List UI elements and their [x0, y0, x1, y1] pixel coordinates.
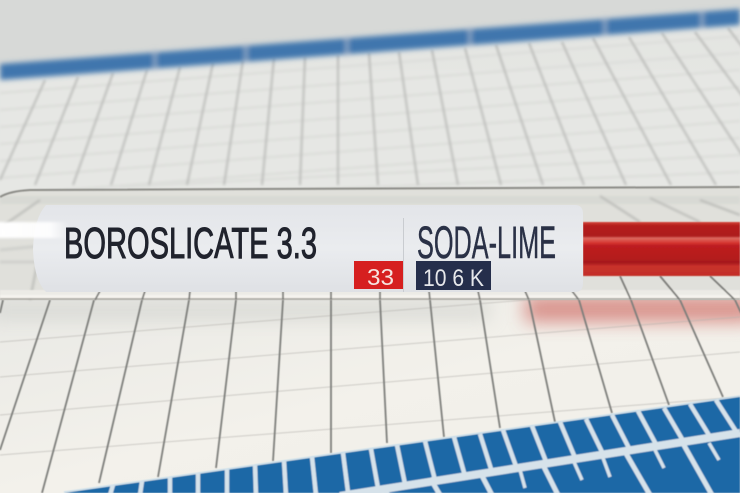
- upper grid, out of focus: [0, 28, 740, 195]
- red value badge: 33: [367, 264, 394, 290]
- tube refracted grid: [0, 196, 740, 300]
- ruler pale strip: [340, 433, 740, 493]
- shadow under tube: [0, 300, 490, 320]
- top blue ruler band: [0, 9, 740, 80]
- tube bottom glass bands: [0, 276, 740, 300]
- label seam: [402, 218, 404, 292]
- paper label: [33, 205, 583, 292]
- blue ruler strip bottom right: [64, 396, 740, 493]
- red reflection on paper: [525, 296, 740, 322]
- ruler body: [64, 397, 740, 493]
- lower grid horizontal lines: [0, 283, 740, 455]
- lower grid vertical lines: [0, 300, 740, 493]
- upper blank sheet: [0, 0, 740, 70]
- ruler upper ticks: [110, 400, 739, 493]
- ruler lower ticks: [382, 440, 719, 493]
- red value badge: [354, 261, 403, 290]
- lower paper sheet: [0, 296, 740, 493]
- ruler outline highlight: [64, 396, 740, 492]
- borosilicate label text: BOROSLICATE 3.3: [64, 219, 317, 268]
- red rod: [583, 222, 740, 276]
- soda-lime label text: SODA-LIME: [417, 217, 556, 268]
- tube top edge: [0, 187, 740, 197]
- glass highlight: [0, 222, 68, 238]
- glass tube: [0, 187, 740, 300]
- tube interior: [0, 187, 740, 300]
- navy value badge: 10 6 K: [423, 265, 484, 292]
